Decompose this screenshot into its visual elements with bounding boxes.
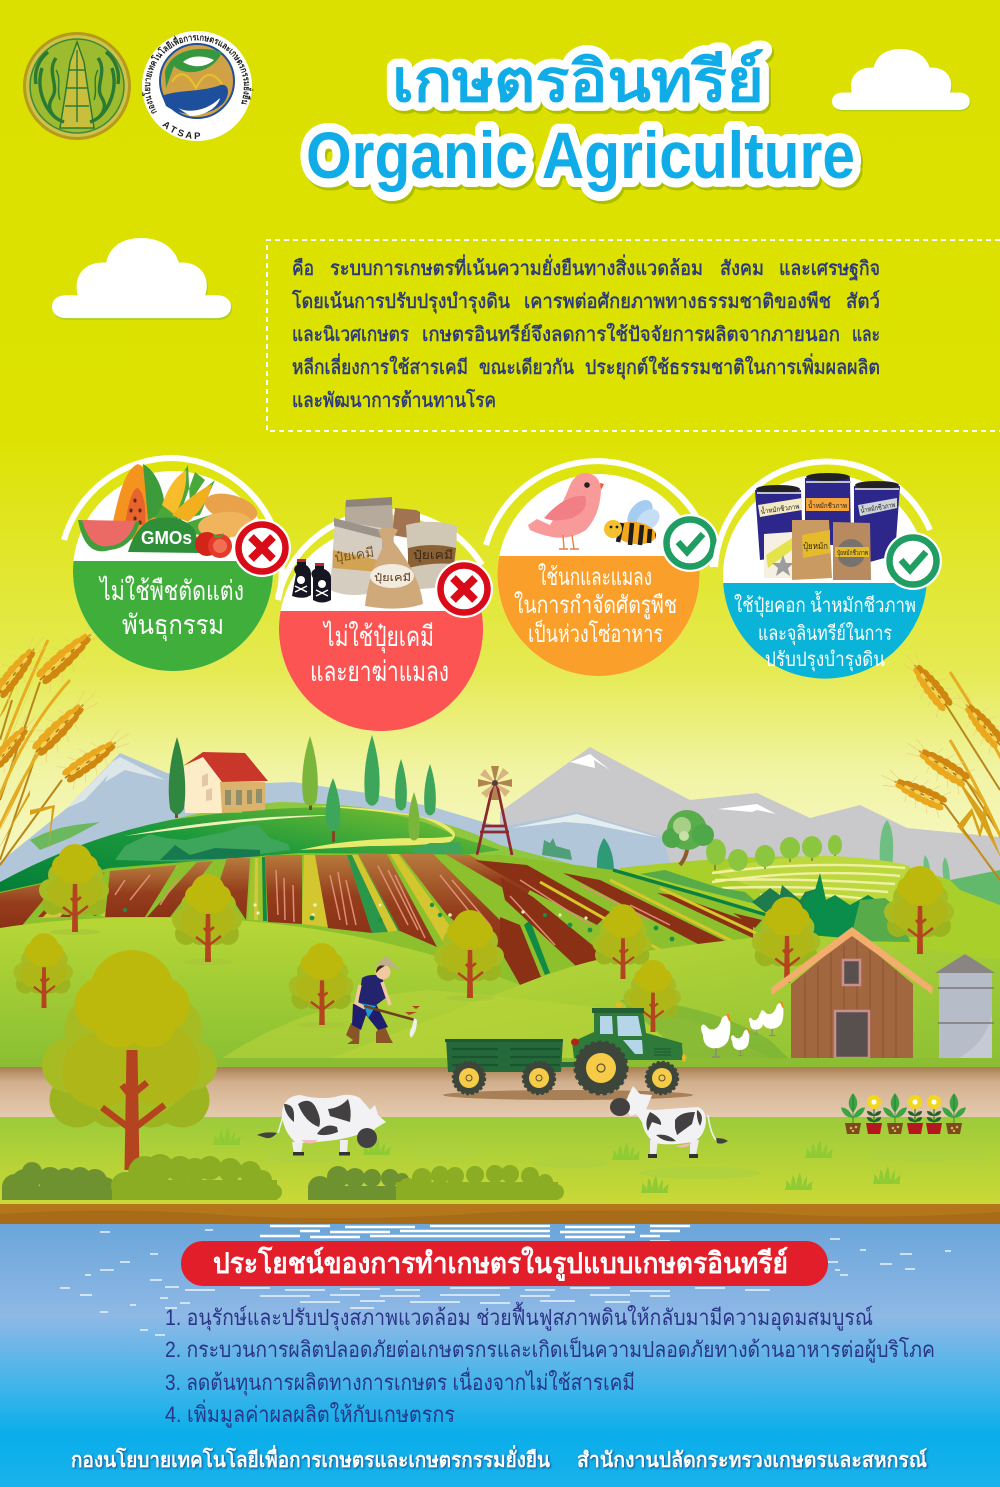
panel: organic fertilizer [715, 462, 942, 679]
definition text line 5: และพัฒนาการต้านทานโรค [292, 389, 496, 412]
definition text line 4 [292, 353, 880, 380]
cypress trees [169, 735, 436, 842]
cow standing [610, 1086, 728, 1158]
logo: ATSAP [142, 31, 254, 141]
definition text line 2: สัตว์ [846, 290, 880, 313]
definition text line 1: และเศรษฐกิจ [779, 258, 880, 280]
text: birds and insects [514, 563, 677, 648]
landscape: distant trees [662, 810, 842, 871]
flower pots [841, 1093, 966, 1134]
icon: produce [78, 464, 260, 558]
text: organic fertilizer [734, 591, 916, 672]
text: organic fertilizer: และจุลินทรีย์ในการ [758, 622, 892, 646]
panel: no chemicals [278, 497, 493, 731]
grass tufts [213, 1127, 901, 1193]
logo ring text: กองนโยบายเทคโนโลยีเพื่อการเกษตรและเกษตรกรรมยั่งยืน [142, 35, 254, 114]
panel: birds and insects [486, 461, 719, 676]
landscape: striped far field [712, 856, 910, 905]
definition text line 1: คือ [292, 258, 314, 280]
logo ATSAP letters: A T S A P [162, 122, 200, 139]
text: no GM crops: พันธุกรรม [122, 610, 224, 642]
definition text line 3: และนิเวศเกษตร [292, 324, 409, 346]
text: no GM crops: ไม่ใช้พืชตัดแต่ง [98, 575, 244, 606]
cow grazing [257, 1095, 386, 1156]
text: no chemicals: และยาฆ่าแมลง [310, 656, 449, 687]
icon: bio-fertilizer barrels: ปุ๋ยหมักชีวภาพ [837, 549, 868, 557]
text: no chemicals: ไม่ใช้ปุ๋ยเคมี [322, 620, 434, 654]
silo [935, 954, 995, 1061]
landscape: mountains [0, 747, 1000, 930]
benefit 4: 4. เพิ่มมูลค่าผลผลิตให้กับเกษตรกร [165, 1399, 455, 1428]
icon: bio-fertilizer barrels: น้ำหมักชีวภาพ [808, 499, 847, 510]
chickens [701, 1002, 784, 1057]
dark hedges behind barn [752, 873, 910, 942]
benefit 1: 1. อนุรักษ์และปรับปรุงสภาพแวดล้อม ช่วยฟื้นฟูสภาพดินให้กลับมามีความอุดมสมบูรณ์ [165, 1302, 873, 1331]
benefit 3: 3. ลดต้นทุนการผลิตทางการเกษตร เนื่องจากไม่ใช้สารเคมี [165, 1367, 635, 1396]
orchard trees [13, 844, 954, 1032]
mid-green hedge along field [640, 870, 760, 905]
definition text line 1: ระบบการเกษตรที่เน้นความยั่งยืนทางสิ่งแวดล้อม [330, 254, 703, 280]
wheat right [875, 644, 1000, 880]
definition text line 1: สังคม [720, 258, 764, 280]
icon: bio-fertilizer barrels [755, 473, 900, 580]
large tree [42, 950, 217, 1170]
landscape: dark green hill and path [0, 806, 500, 905]
icon: prohibited [233, 519, 291, 577]
definition text line 1 [292, 254, 880, 280]
GMOs label: GMOs [141, 527, 192, 548]
front hills [0, 917, 1000, 1070]
text: organic fertilizer: ใช้ปุ๋ยคอก น้ำหมักชีวภาพ [734, 591, 916, 618]
title: Thai: เกษตรอินทรีย์ [392, 48, 764, 114]
wheat left [0, 610, 138, 865]
road [0, 1067, 1000, 1118]
icon: prohibited [435, 560, 493, 618]
text: no chemicals [310, 620, 449, 687]
text: birds and insects: ใช้นกและแมลง [538, 563, 652, 591]
green strip [0, 1058, 1000, 1068]
landscape: back hills [0, 802, 1000, 1000]
cloud top right [832, 49, 970, 110]
definition text line 3: เกษตรอินทรีย์จึงลดการใช้ปัจจัยการผลิตจากภายนอก [422, 323, 840, 346]
benefits heading text: ประโยชน์ของการทำเกษตรในรูปแบบเกษตรอินทรีย์ [213, 1245, 788, 1281]
definition text line 2: โดยเน้นการปรับปรุงบำรุงดิน [292, 290, 510, 314]
icon: approved [884, 532, 942, 590]
icon: pink bird [528, 473, 604, 549]
definition text line 3: และ [852, 324, 880, 346]
icon: pesticide bottles [292, 559, 331, 602]
definition text line 4: หลีกเลี่ยงการใช้สารเคมี [292, 353, 468, 379]
tractor with trailer [443, 1002, 693, 1100]
definition text line 2: เคารพต่อศักยภาพทางธรรมชาติของพืช [524, 291, 831, 313]
title: English: Organic Agriculture [306, 118, 855, 192]
benefits heading pill [181, 1241, 828, 1286]
text: no GM crops [98, 575, 244, 642]
icon: bio-fertilizer barrels: ปุ๋ยหมัก [803, 541, 828, 552]
icon: approved [661, 514, 719, 572]
icon: fertilizer sacks [292, 497, 457, 609]
definition box [267, 240, 1000, 431]
definition text line 4: ประยุกต์ใช้ธรรมชาติในการเพิ่มผลผลิต [585, 353, 880, 380]
windmill [477, 766, 512, 855]
cloud left [52, 238, 231, 318]
river bank [0, 1200, 1000, 1224]
barn [771, 927, 933, 1058]
icon: fertilizer sacks: ปุ๋ยเคมี [333, 545, 375, 566]
sack labels: ปุ๋ยเคมี [374, 572, 411, 584]
text: organic fertilizer: ปรับปรุงบำรุงดิน [765, 649, 885, 672]
definition text line 4: ขณะเดียวกัน [479, 357, 574, 379]
footer: division: กองนโยบายเทคโนโลยีเพื่อการเกษตรและเกษตรกรรมยั่งยืน [71, 1444, 551, 1472]
definition text line 2 [292, 290, 880, 314]
crop field rows [0, 853, 790, 990]
logo: royal seal [23, 32, 131, 140]
text: birds and insects: ในการกำจัดศัตรูพืช [514, 591, 677, 620]
lower meadow [0, 1117, 1000, 1204]
icon: bio-fertilizer barrels: น้ำหมักชีวภาพ [859, 498, 896, 515]
footer: ministry office: สำนักงานปลัดกระทรวงเกษตรและสหกรณ์ [577, 1448, 927, 1472]
bushes [2, 1154, 564, 1200]
house [183, 752, 268, 813]
text: birds and insects: เป็นห่วงโซ่อาหาร [528, 619, 663, 648]
barrel labels: น้ำหมักชีวภาพ [760, 500, 800, 516]
panel: no GMOs [64, 458, 291, 671]
benefits list [165, 1302, 935, 1428]
farmer [346, 956, 420, 1044]
icon: fertilizer sacks: ปุ๋ยเคมี [413, 548, 453, 563]
footer [71, 1444, 927, 1472]
meadow patches [265, 1147, 987, 1179]
water panel [0, 1224, 1000, 1487]
icon: bee [604, 495, 664, 547]
